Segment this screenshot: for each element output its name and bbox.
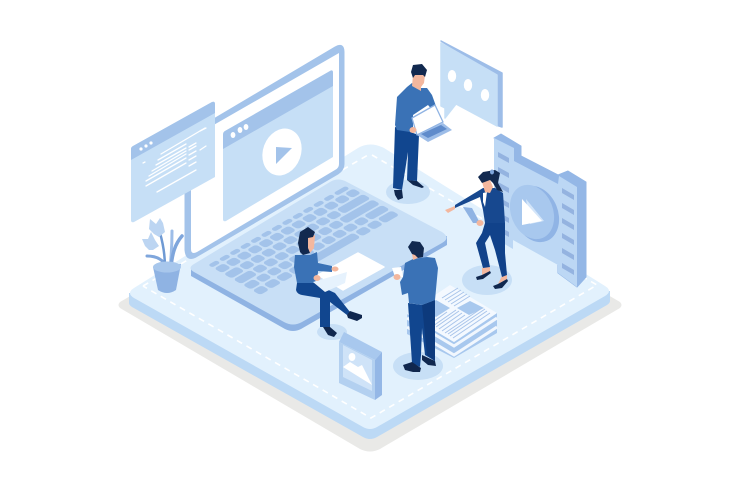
jacket: [455, 188, 505, 223]
platform: [129, 144, 610, 439]
laptop screen display: [191, 53, 339, 253]
hair: [411, 64, 427, 78]
hair: [408, 241, 424, 258]
person: seated woman: [294, 227, 362, 340]
key row 2: [224, 194, 371, 278]
holding hand: [476, 220, 484, 226]
small laptop: [313, 272, 347, 292]
hair: [298, 227, 315, 255]
shoes: [394, 180, 424, 200]
window dots: [231, 124, 248, 138]
laptop base: [417, 123, 452, 142]
plant flowers: [142, 218, 165, 250]
trousers: [393, 127, 419, 190]
neck and face: [412, 75, 425, 91]
plant: [142, 218, 182, 293]
plant pot: [153, 264, 181, 293]
key row 4: [243, 205, 390, 290]
hand: [394, 274, 400, 280]
hands: [314, 266, 338, 281]
laptop base side: [191, 236, 447, 331]
keyboard: [208, 185, 399, 295]
floor circle: [317, 324, 347, 340]
hand: [410, 127, 416, 133]
sweater: [294, 252, 332, 283]
picture mountains: [343, 362, 372, 385]
code window dots: [139, 141, 153, 151]
code window header: [131, 102, 215, 160]
shoes: [476, 271, 508, 289]
laptop screen frame: [185, 45, 344, 258]
hair and ponytail: [478, 170, 503, 192]
platform shadow: [118, 162, 622, 452]
shirt: [483, 192, 487, 207]
newspaper text lines: [430, 288, 490, 338]
picture area: [343, 345, 372, 391]
film side and top: [494, 134, 586, 287]
key row 3: [233, 200, 380, 284]
chat bubble: [441, 41, 502, 127]
film play disc: [502, 178, 567, 249]
play button: [256, 123, 308, 181]
window header: [223, 70, 333, 149]
sweater: [395, 83, 441, 132]
face: [308, 235, 315, 253]
stack layers: [407, 318, 497, 355]
platform top: [130, 144, 609, 429]
newspaper stack: [407, 285, 497, 358]
code lines: [143, 128, 206, 192]
bubble face: [441, 43, 497, 126]
tablet: [463, 207, 480, 223]
image tile: [339, 332, 382, 400]
laptop base top: [190, 180, 446, 324]
laptop screen: [412, 105, 443, 135]
tile top edge: [339, 332, 382, 360]
trousers: [296, 282, 350, 327]
trackpad: [318, 253, 384, 290]
plant leaves: [147, 231, 182, 268]
neck: [412, 253, 418, 260]
tile face: [339, 342, 375, 400]
newspaper images: [422, 300, 484, 317]
sweater: [400, 257, 438, 305]
bubble thickness: [441, 41, 502, 127]
person: woman pointing: [445, 170, 512, 295]
platform dashed outline: [143, 155, 597, 418]
key row 1: [214, 188, 361, 273]
person: man with phone: [392, 241, 443, 380]
phone: [392, 267, 403, 277]
ankles: [482, 267, 507, 284]
hair band: [490, 170, 494, 174]
stack sides: [407, 313, 497, 358]
laptop: [185, 45, 447, 331]
trousers: [408, 300, 435, 367]
person: man with laptop: [386, 64, 452, 204]
video window: [223, 70, 333, 221]
film face: [494, 138, 577, 287]
face: [482, 180, 493, 193]
function row: [208, 186, 350, 268]
shoes: [323, 311, 362, 337]
code window: [131, 102, 215, 222]
floor circle: [462, 265, 512, 295]
floor circle: [386, 180, 430, 204]
bubble dots: [448, 70, 489, 101]
space bar row: [252, 210, 399, 295]
trousers: [476, 223, 507, 277]
newspaper page: [407, 285, 497, 342]
film holes: [498, 152, 574, 275]
picture sun: [349, 353, 355, 361]
film strip with play button: [494, 134, 586, 287]
platform side: [129, 291, 610, 439]
shoes: [403, 355, 436, 372]
floor circle: [393, 352, 443, 380]
tile side: [375, 352, 382, 400]
pointing hand: [445, 206, 455, 213]
